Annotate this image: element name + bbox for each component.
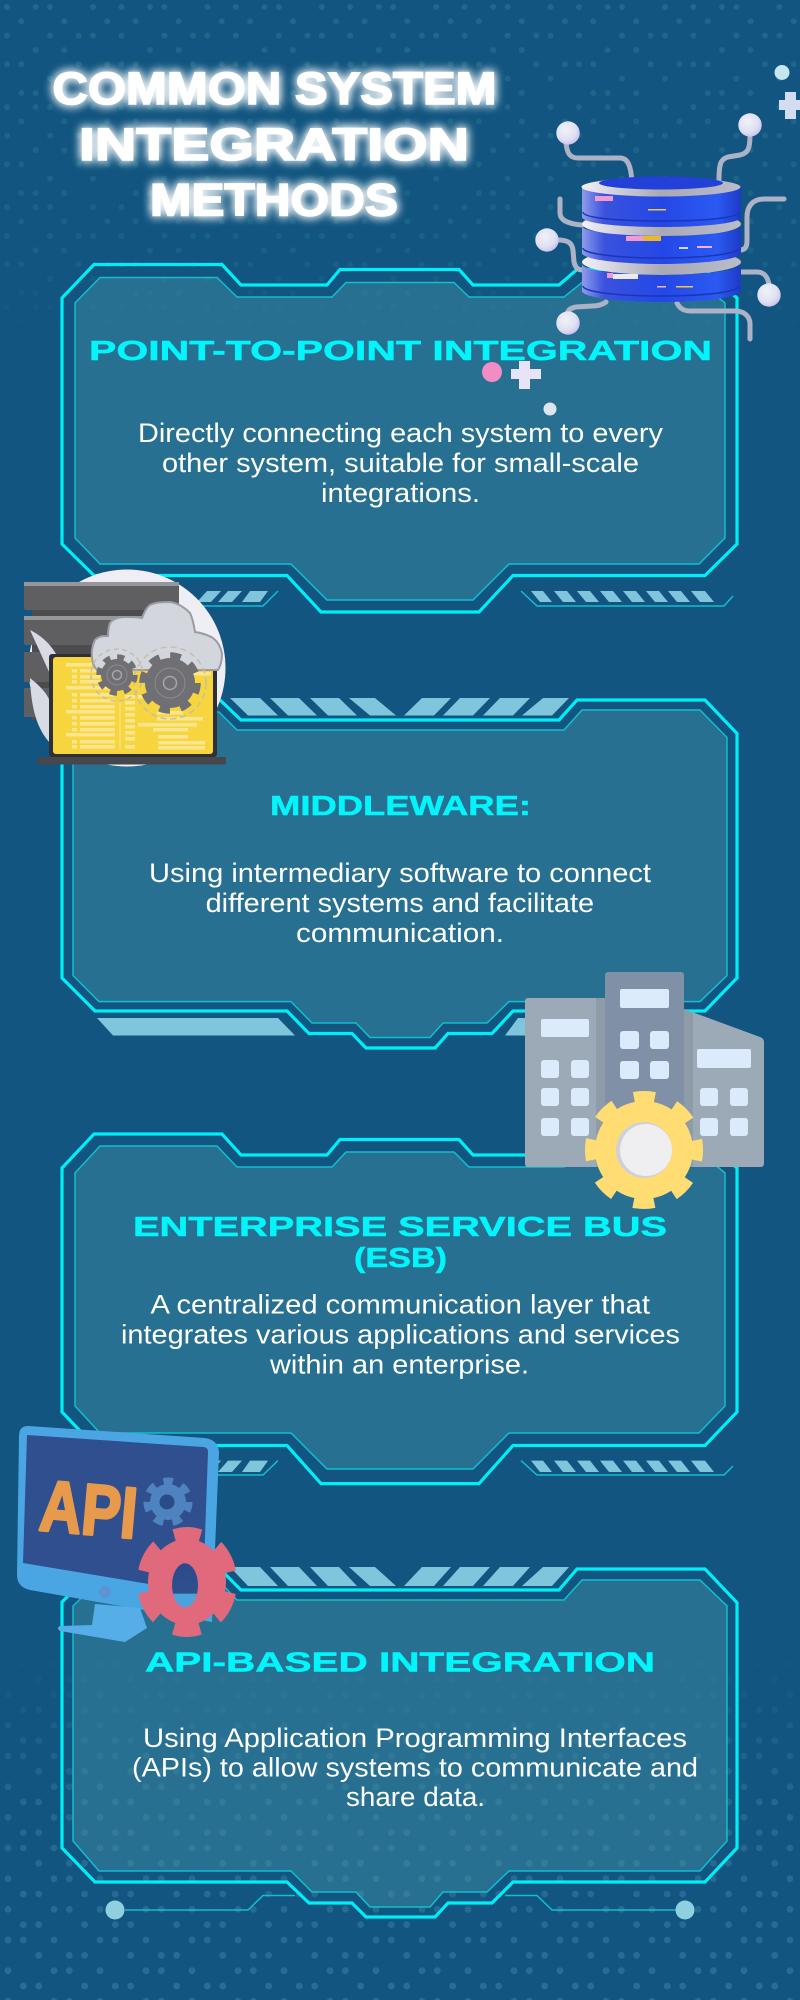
icon: API monitor with gears — [17, 1426, 230, 1642]
heading: point-to-point: POINT-TO-POINT INTEGRATION — [89, 335, 712, 366]
text: point-to-point description: Directly connecting each system to every — [138, 418, 664, 448]
code lines — [66, 663, 211, 750]
text: point-to-point description: integrations. — [321, 478, 480, 508]
heading: enterprise service bus: ENTERPRISE SERVICE BUS — [133, 1211, 667, 1242]
API label: API — [37, 1466, 140, 1554]
panel: enterprise service bus — [62, 1134, 737, 1484]
icon: enterprise building with gear — [525, 972, 764, 1201]
text: point-to-point description: other system, suitable for small-scale — [162, 448, 639, 478]
text: point-to-point description — [138, 418, 664, 508]
text: enterprise service bus description: integrates various applications and services — [121, 1320, 680, 1350]
text: api-based integration description: share data. — [346, 1782, 485, 1812]
heading: api-based integration: API-BASED INTEGRATION — [145, 1646, 655, 1678]
title: COMMON SYSTEM — [52, 63, 496, 114]
connector: left dot — [106, 1896, 295, 1920]
title: INTEGRATION — [79, 119, 469, 170]
text: middleware description: different systems and facilitate — [206, 888, 594, 918]
icon: database stack — [535, 113, 784, 339]
heading: enterprise service bus — [133, 1211, 667, 1273]
text: api-based integration description: Using Application Programming Interfaces — [143, 1723, 687, 1753]
text: enterprise service bus description — [121, 1290, 680, 1380]
panel: middleware — [62, 698, 737, 1048]
heading: enterprise service bus: (ESB) — [354, 1242, 447, 1273]
panel: point-to-point integration — [62, 264, 737, 612]
heading: middleware: MIDDLEWARE: — [270, 790, 531, 821]
icon: floating particles top right — [774, 65, 800, 119]
title: METHODS — [150, 174, 398, 226]
text: enterprise service bus description: within an enterprise. — [269, 1350, 529, 1380]
title — [52, 63, 496, 226]
icon: floating particles centre — [482, 361, 556, 416]
panel: api-based integration — [62, 1567, 737, 1920]
text: api-based integration description: (APIs) to allow systems to communicate and — [132, 1752, 698, 1782]
text: middleware description: communication. — [296, 918, 504, 948]
text: middleware description — [149, 858, 652, 948]
connector: right dot — [505, 1896, 694, 1920]
text: middleware description: Using intermediary software to connect — [149, 858, 652, 888]
text: api-based integration description — [132, 1723, 698, 1812]
text: enterprise service bus description: A centralized communication layer that — [150, 1290, 651, 1320]
icon: middleware laptop and cloud — [24, 570, 226, 766]
